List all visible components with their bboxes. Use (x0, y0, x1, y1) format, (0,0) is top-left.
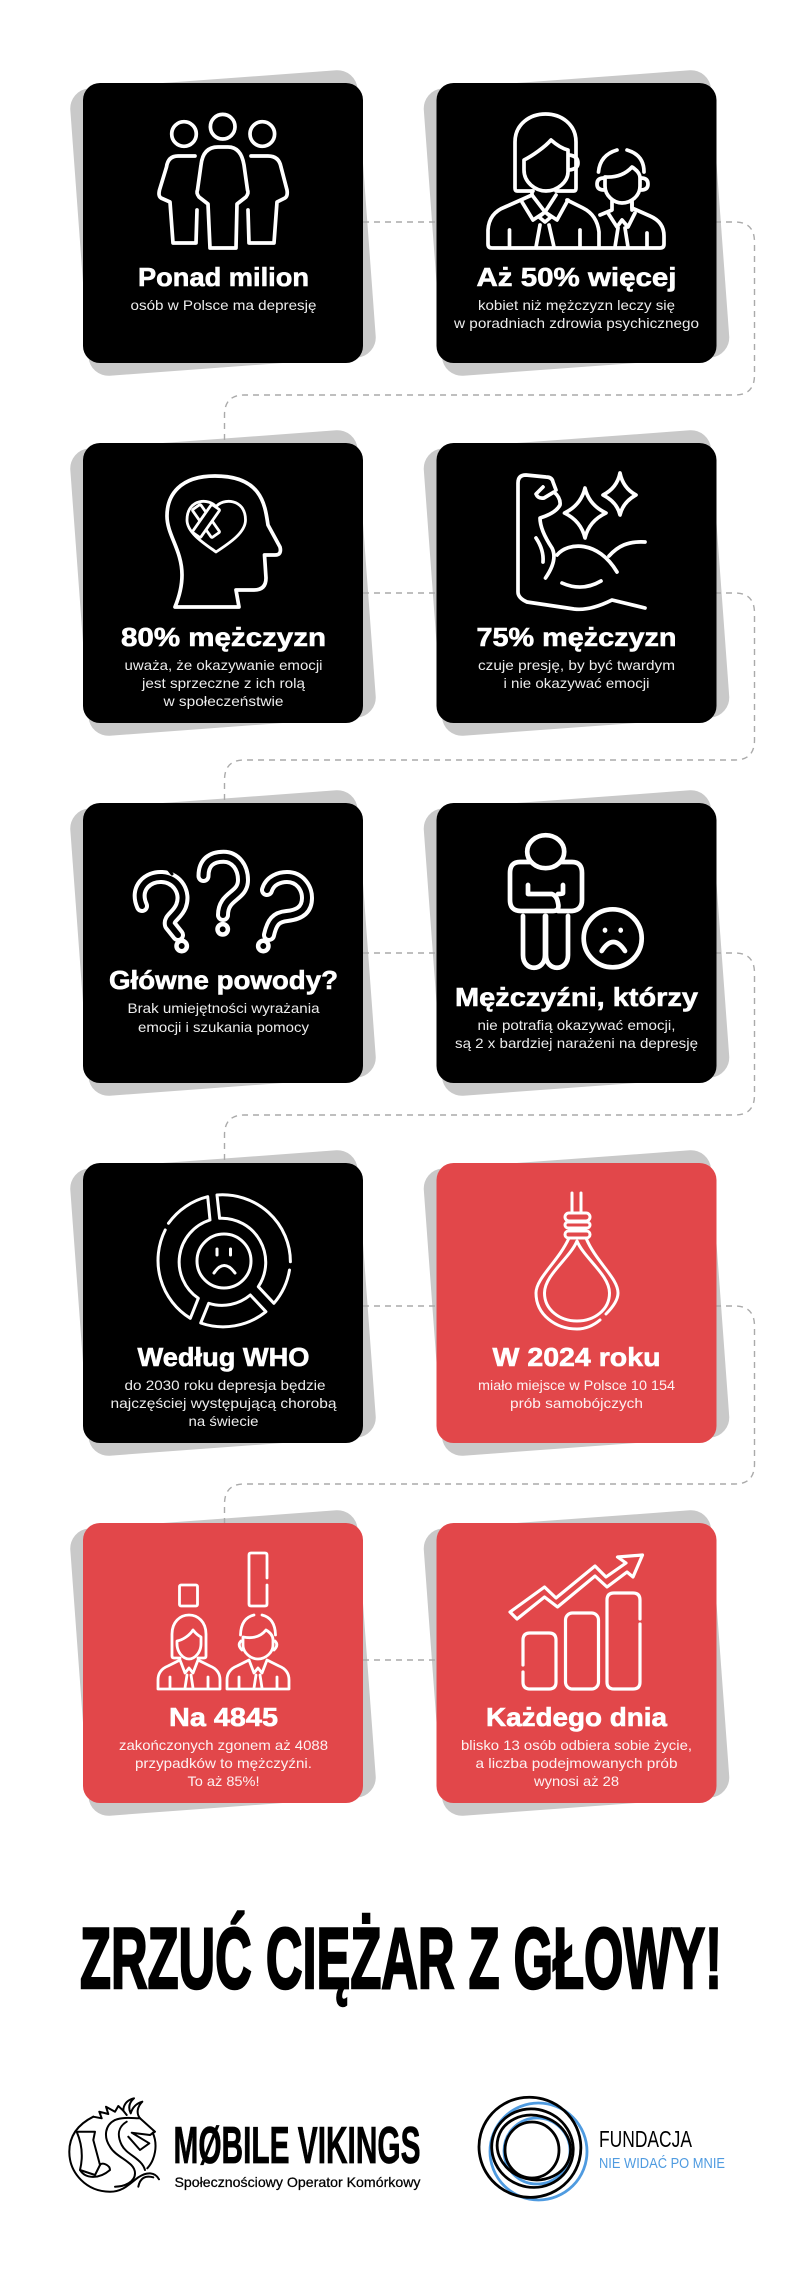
arrow: connector row 2 to row 3 (224, 593, 754, 803)
text block: To aż 85%! (188, 1773, 260, 1789)
text block (478, 657, 675, 691)
panel: aż 50% więcej (436, 83, 716, 363)
icon: noose (536, 1193, 618, 1329)
icon: swirled rings (468, 2086, 592, 2209)
heading: 80% mężczyzn (121, 622, 326, 652)
text block: miało miejsce w Polsce 10 154 (478, 1377, 675, 1393)
icon: woman and man with bars (158, 1553, 289, 1689)
text block: do 2030 roku depresja będzie (124, 1377, 326, 1393)
arrow: connector row 1 to row 2 (224, 222, 754, 443)
text block: prób samobójczych (510, 1395, 643, 1411)
text block: uważa, że okazywanie emocji (124, 657, 322, 673)
text block: są 2 x bardziej narażeni na depresję (455, 1035, 698, 1051)
text block: osób w Polsce ma depresję (130, 297, 317, 313)
icon: three people (159, 114, 287, 248)
text block (455, 1017, 698, 1051)
icon: seated man with sad face (510, 835, 642, 968)
text block (461, 1737, 692, 1789)
arrow: connector row 4 to row 5 (224, 1306, 754, 1523)
text block: w poradniach zdrowia psychicznego (453, 315, 699, 331)
heading: 75% mężczyzn (476, 622, 676, 652)
text block (453, 297, 699, 331)
icon: rising bars and arrow (510, 1555, 642, 1689)
text block: w społeczeństwie (162, 693, 284, 709)
logo: fundacja nie widać po mnie (468, 2086, 725, 2209)
text block (128, 1000, 320, 1035)
icon: segmented ring with sad face (158, 1195, 290, 1327)
text block: Społecznościowy Operator Komórkowy (174, 2174, 420, 2190)
text block: kobiet niż mężczyzn leczy się (478, 297, 675, 313)
icon: woman and man (488, 114, 664, 248)
card shadows (69, 69, 731, 1817)
text block (124, 657, 322, 709)
arrow: connector row 5 (363, 1659, 437, 1661)
text block (119, 1737, 328, 1789)
text block: przypadków to mężczyźni. (135, 1755, 312, 1771)
heading: Główne powody? (109, 965, 338, 995)
text block: nie potrafią okazywać emocji, (478, 1017, 676, 1033)
text block: emocji i szukania pomocy (138, 1019, 309, 1035)
text block (110, 1377, 337, 1429)
text block: czuje presję, by być twardym (478, 657, 675, 673)
panel: ponad milion (83, 83, 363, 363)
heading: W 2024 roku (492, 1342, 660, 1372)
heading: Każdego dnia (486, 1702, 668, 1732)
text block: NIE WIDAĆ PO MNIE (599, 2155, 725, 2172)
heading: Według WHO (138, 1342, 310, 1372)
panel: główne powody (83, 803, 363, 1083)
heading: Mężczyźni, którzy (455, 982, 699, 1012)
icon: head with bandaged heart (167, 476, 280, 607)
panel: w 2024 roku (436, 1163, 716, 1443)
arrow: connector row 3 to row 4 (224, 953, 754, 1163)
panel: według WHO (83, 1163, 363, 1443)
icon: dragon emblem (69, 2098, 159, 2192)
heading: Aż 50% więcej (476, 262, 676, 292)
icon: flexed arm with sparkles (518, 473, 645, 609)
text block: Brak umiejętności wyrażania (128, 1000, 320, 1016)
text block: wynosi aż 28 (533, 1773, 619, 1789)
text block (478, 1377, 675, 1411)
heading: Ponad milion (138, 262, 309, 292)
text block: i nie okazywać emocji (504, 675, 650, 691)
logo: mobile vikings (69, 2098, 421, 2192)
panel: mężczyźni, którzy (436, 803, 716, 1083)
panel: 80% mężczyzn (83, 443, 363, 723)
heading: Na 4845 (169, 1702, 278, 1732)
text block: blisko 13 osób odbiera sobie życie, (461, 1737, 692, 1753)
icon: three question marks (140, 857, 307, 951)
panel: każdego dnia (436, 1523, 716, 1803)
panel: 75% mężczyzn (436, 443, 716, 723)
panel: na 4845 (83, 1523, 363, 1803)
text block: a liczba podejmowanych prób (476, 1755, 678, 1771)
text block: na świecie (188, 1413, 259, 1429)
heading: MØBILE VIKINGS (174, 2117, 420, 2175)
text block: zakończonych zgonem aż 4088 (119, 1737, 328, 1753)
heading: FUNDACJA (599, 2126, 692, 2152)
text block: najczęściej występującą chorobą (110, 1395, 337, 1411)
text block: jest sprzeczne z ich rolą (141, 675, 305, 691)
